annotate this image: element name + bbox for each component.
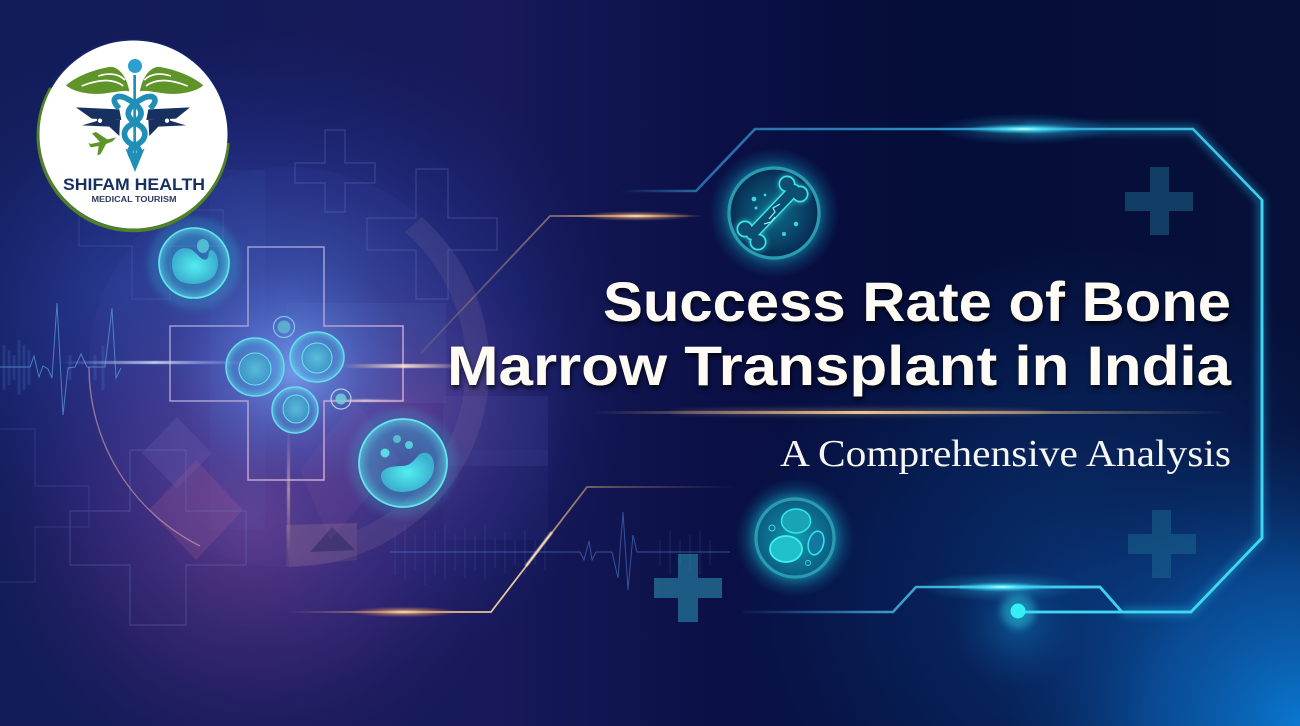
bone outline [736,176,808,250]
large cross outline [170,247,403,480]
logo badge [37,39,229,231]
gold flares [349,211,694,618]
light flares on cross [60,361,470,555]
heartbeat bottom [390,512,730,590]
soft core glow [170,257,420,487]
cell: bottom right [349,409,457,517]
node dot [1001,594,1035,628]
outlined background crosses [0,130,497,625]
gold circuit line top [421,216,705,353]
arc [89,367,200,546]
heartbeat left [0,303,121,415]
frame flares [917,113,1114,602]
title: Marrow Transplant in India [447,334,1232,397]
solid plus icons [654,167,1196,622]
cell: top left [148,217,240,309]
background geometric shapes [89,167,548,567]
title [447,270,1232,397]
staff and snakes [114,59,155,167]
navy wings [76,107,190,136]
title: Success Rate of Bone [603,270,1231,333]
central cell cluster [226,316,351,433]
logo tagline: MEDICAL TOURISM [92,195,176,204]
logo caduceus emblem [66,59,203,172]
subtitle: A Comprehensive Analysis [780,433,1231,475]
frame glow [1024,129,1261,612]
logo disc [37,39,229,231]
feather tail [125,148,145,172]
icon: bone [708,147,840,279]
logo name: SHIFAM HEALTH [63,176,205,194]
green wings [66,67,203,94]
circuit frame [620,129,1262,612]
gold circuit line bottom [286,487,735,612]
title divider [590,408,1230,416]
plane [88,132,116,155]
icon: cells in circle [735,478,855,598]
